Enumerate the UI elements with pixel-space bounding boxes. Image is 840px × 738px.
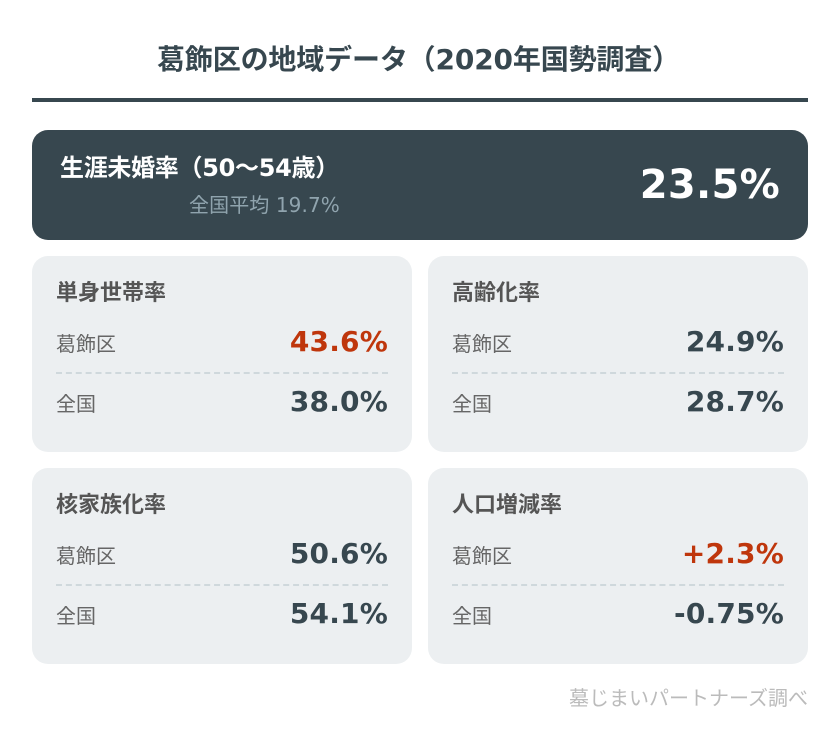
heading: 単身世帯率	[56, 281, 166, 306]
value: national: 28.7%	[686, 385, 784, 418]
value: national: 54.1%	[290, 597, 388, 630]
heading: 核家族化率	[56, 493, 166, 518]
national average: 全国平均 19.7%	[189, 193, 340, 217]
label: national: 全国	[452, 392, 492, 416]
label: Katsushika: 葛飾区	[56, 332, 116, 356]
label: national: 全国	[56, 392, 96, 416]
panel: lifetime unmarried rate	[32, 130, 808, 240]
label: national: 全国	[56, 604, 96, 628]
title: 葛飾区の地域データ（2020年国勢調査）	[157, 43, 680, 76]
label: Katsushika: 葛飾区	[452, 332, 512, 356]
value: national: 38.0%	[290, 385, 388, 418]
label: Katsushika: 葛飾区	[452, 544, 512, 568]
value: Katsushika: +2.3%	[682, 537, 784, 570]
main value: 23.5%	[640, 162, 780, 208]
panel: single households	[32, 256, 412, 452]
heading: 人口増減率	[452, 493, 562, 518]
value: Katsushika: 43.6%	[290, 325, 388, 358]
heading: lifetime unmarried rate: 生涯未婚率（50～54歳）	[60, 154, 339, 182]
heading: 高齢化率	[452, 281, 540, 306]
panel: nuclear family rate	[32, 468, 412, 664]
label: Katsushika: 葛飾区	[56, 544, 116, 568]
value: Katsushika: 50.6%	[290, 537, 388, 570]
value: Katsushika: 24.9%	[686, 325, 784, 358]
source note: 墓じまいパートナーズ調べ	[569, 686, 808, 710]
value: national: -0.75%	[674, 597, 784, 630]
panel: population change	[428, 468, 808, 664]
label: national: 全国	[452, 604, 492, 628]
panel: aging rate	[428, 256, 808, 452]
